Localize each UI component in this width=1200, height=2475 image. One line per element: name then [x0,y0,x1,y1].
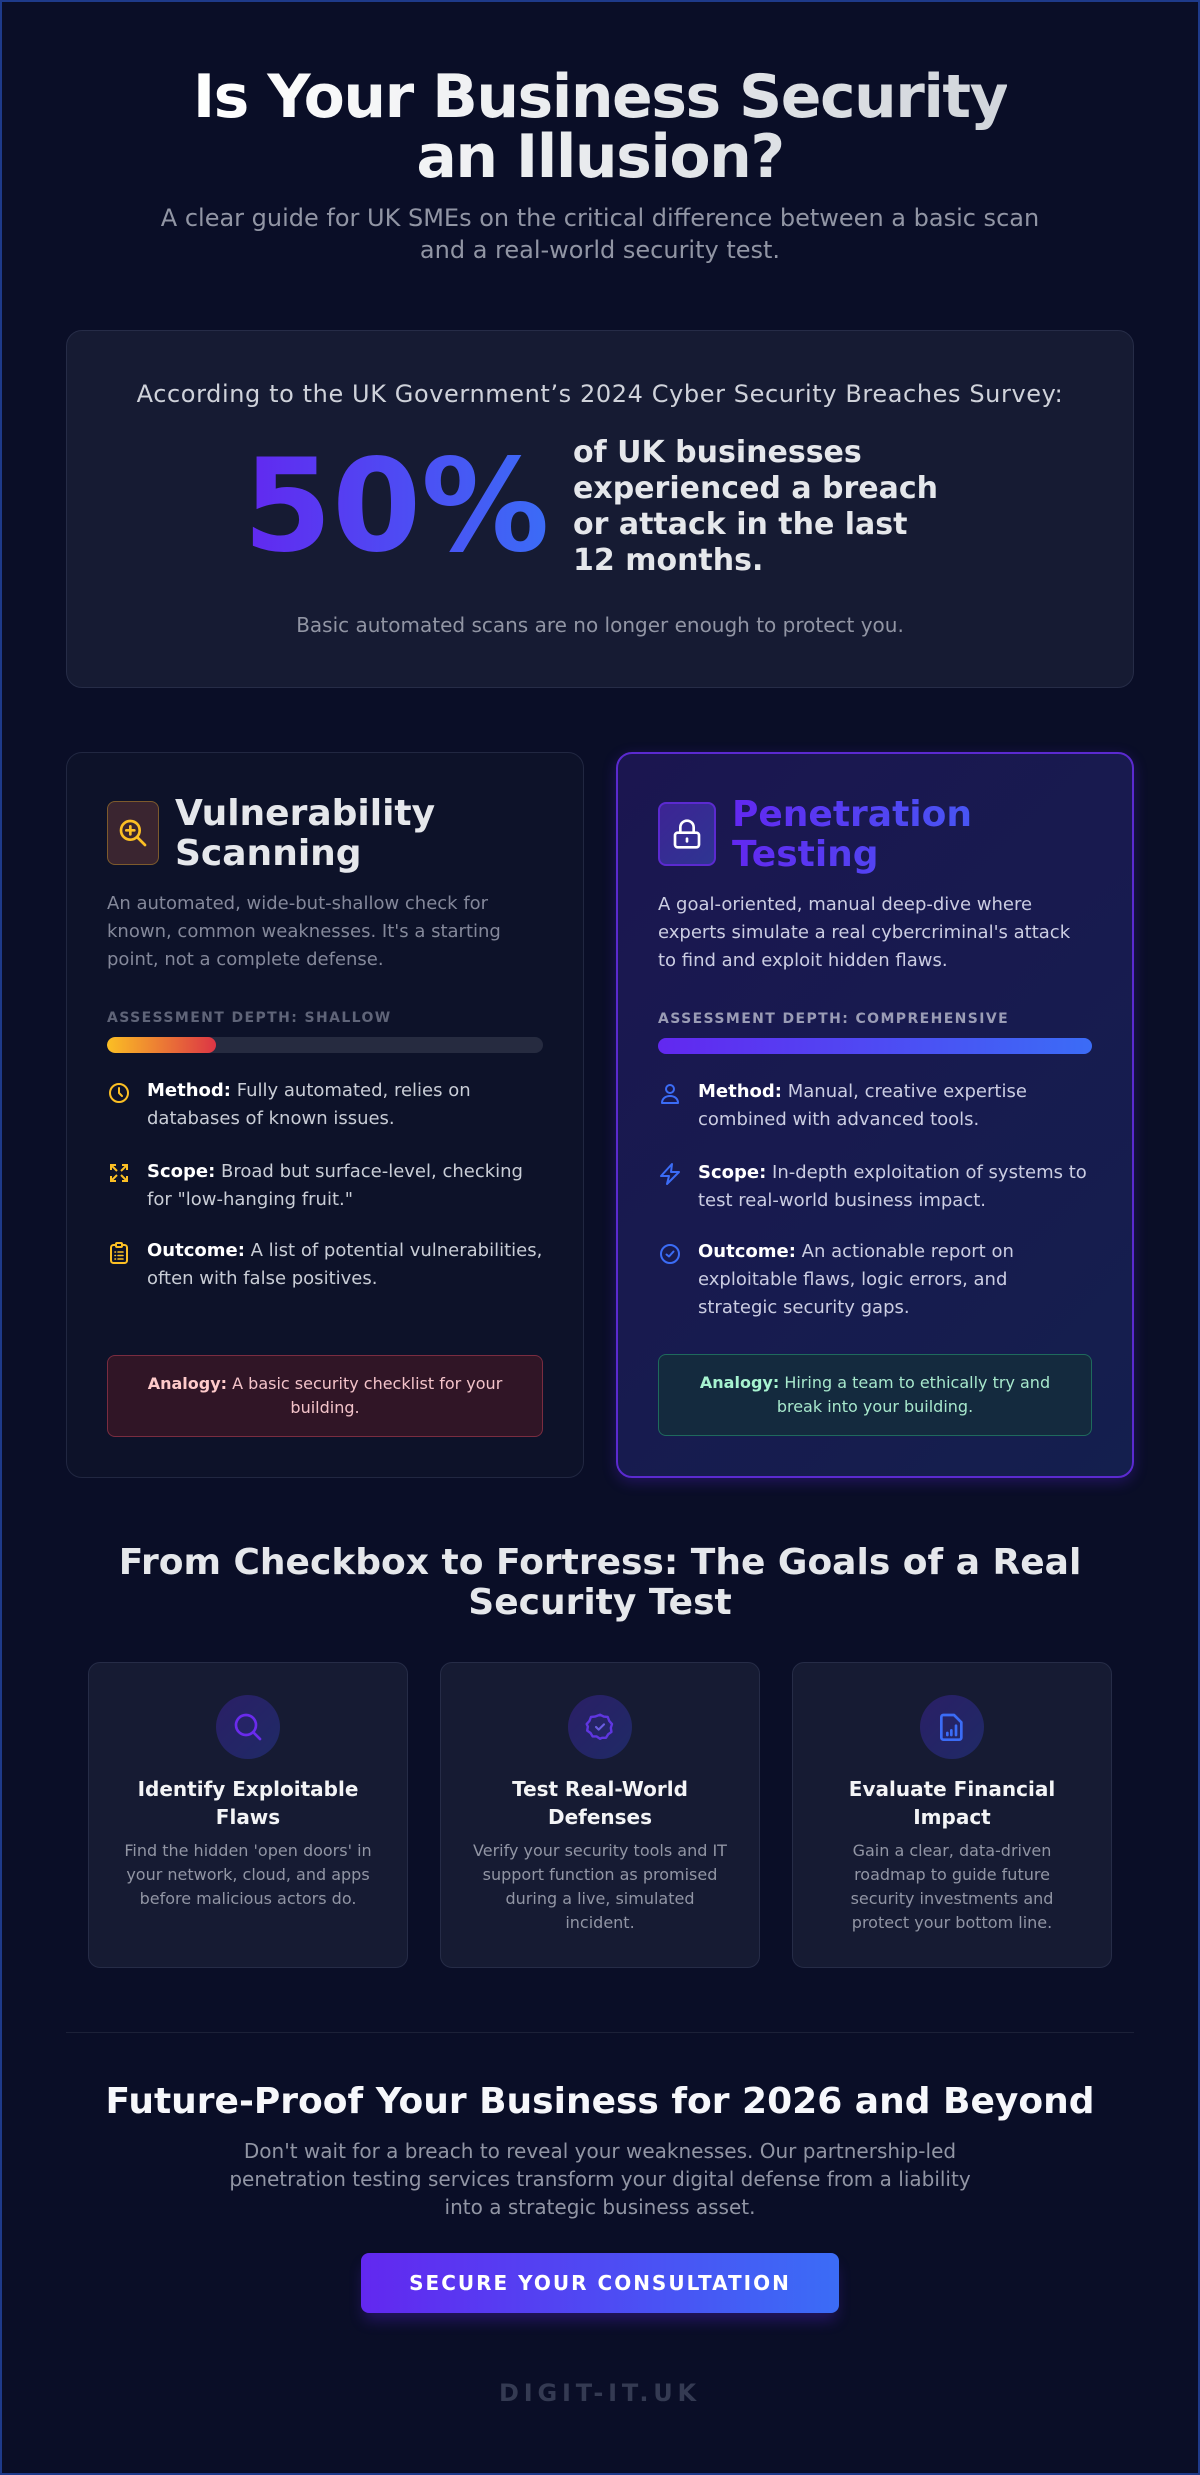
item: method: combined with advanced tools. [698,1109,979,1130]
footer text: into a strategic business asset. [445,2195,755,2219]
item: outcome [110,1240,542,1289]
description: experts simulate a real cybercriminal's attack [658,922,1070,943]
description: An automated, wide-but-shallow check for [107,893,488,914]
statistic description: experienced a breach [573,471,938,506]
item: outcome: exploitable flaws, logic errors, and [698,1269,1007,1290]
goal text [124,1841,372,1908]
item: scope: Scope: In-depth exploitation of systems to [698,1162,1087,1183]
heading [175,793,435,874]
goal text: during a live, simulated [506,1889,694,1908]
item: scope: Scope: Broad but surface-level, checking [147,1161,523,1182]
subtitle: A clear guide for UK SMEs on the critical difference between a basic scan [161,204,1039,232]
call to action button [361,2253,839,2313]
item: scope: test real-world business impact. [698,1190,986,1211]
goal heading: Defenses [548,1805,652,1829]
icon: shield badge [568,1695,632,1759]
panel: goal 3 [792,1662,1112,1968]
callout: analogy: Analogy: Hiring a team to ethically try and [700,1373,1050,1392]
item: outcome [660,1241,1014,1318]
heading: Vulnerability [175,793,435,834]
item: scope [660,1162,1087,1211]
item: method [661,1081,1027,1130]
section heading [119,1542,1081,1623]
goal heading: Impact [913,1805,991,1829]
footer heading: Future-Proof Your Business for 2026 and Beyond [106,2081,1094,2122]
item: method: Method: Manual, creative expertise [698,1081,1027,1102]
callout: analogy: Analogy: A basic security checklist for your [148,1374,502,1393]
call to action button: SECURE YOUR CONSULTATION [409,2271,791,2295]
statistic description [573,435,938,578]
goal heading [512,1777,688,1829]
description: A goal-oriented, manual deep-dive where [658,894,1032,915]
description [658,894,1070,971]
survey source line: According to the UK Government’s 2024 Cyber Security Breaches Survey: [137,380,1063,408]
icon: padlock [658,802,716,866]
goal text: Verify your security tools and IT [473,1841,727,1860]
icon: magnifier with plus [107,801,159,865]
footer text: Don't wait for a breach to reveal your weaknesses. Our partnership-led [244,2139,956,2163]
goal text: Find the hidden 'open doors' in [124,1841,372,1860]
big number 50%: 50% [243,432,549,581]
goal text: protect your bottom line. [852,1913,1052,1932]
description: to find and exploit hidden flaws. [658,950,948,971]
goal text: roadmap to guide future [854,1865,1050,1884]
item: method: databases of known issues. [147,1108,395,1129]
statistic description: 12 months. [573,543,763,578]
description: known, common weaknesses. It's a starting [107,921,501,942]
item: outcome: often with false positives. [147,1268,377,1289]
goal heading: Evaluate Financial [849,1777,1055,1801]
callout: analogy [658,1354,1092,1436]
goal heading: Flaws [216,1805,280,1829]
item: method: Method: Fully automated, relies on [147,1080,471,1101]
callout: analogy: building. [290,1398,360,1417]
title [193,62,1007,192]
panel: goal 1 [88,1662,408,1968]
description: point, not a complete defense. [107,949,384,970]
statistic description: or attack in the last [573,507,908,542]
goal text: incident. [565,1913,635,1932]
item: outcome: strategic security gaps. [698,1297,910,1318]
description [107,893,501,970]
goal text [851,1841,1053,1932]
icon: document chart [920,1695,984,1759]
callout: analogy: break into your building. [777,1397,973,1416]
goal text [473,1841,727,1932]
panel: vulnerability scanning [66,752,584,1478]
goal text: security investments and [851,1889,1053,1908]
goal heading: Identify Exploitable [138,1777,358,1801]
depth bar: 100% [658,1038,1092,1054]
item: method [109,1080,471,1129]
statistic note: Basic automated scans are no longer enough to protect you. [296,613,904,637]
goal text: your network, cloud, and apps [126,1865,370,1884]
brand wordmark: DIGIT-IT.UK [499,2379,701,2407]
goal text: support function as promised [483,1865,717,1884]
item: scope [110,1161,523,1210]
depth bar: 25% [107,1037,543,1053]
title: Is Your Business Security [193,62,1007,132]
depth label: ASSESSMENT DEPTH: SHALLOW [107,1010,392,1026]
icon: search [216,1695,280,1759]
heading: Penetration [732,794,972,835]
section heading: From Checkbox to Fortress: The Goals of a Real [119,1542,1081,1583]
statistic description: of UK businesses [573,435,862,470]
goal heading [849,1777,1055,1829]
goal text: Gain a clear, data-driven [853,1841,1051,1860]
panel: penetration testing [616,752,1134,1478]
goal heading [138,1777,358,1829]
depth label: ASSESSMENT DEPTH: COMPREHENSIVE [658,1011,1009,1027]
footer text [229,2139,971,2219]
panel: goal 2 [440,1662,760,1968]
goal heading: Test Real-World [512,1777,688,1801]
subtitle [161,204,1039,264]
subtitle: and a real-world security test. [420,236,780,264]
panel: statistic [66,330,1134,688]
goal text: before malicious actors do. [140,1889,356,1908]
section heading: Security Test [468,1582,732,1623]
heading: Testing [732,834,879,875]
item: scope: for "low-hanging fruit." [147,1189,353,1210]
callout: analogy [107,1355,543,1437]
heading [732,795,1092,875]
footer text: penetration testing services transform your digital defense from a liability [229,2167,971,2191]
heading: Scanning [175,833,362,874]
item: outcome: Outcome: A list of potential vulnerabilities, [147,1240,542,1261]
title: an Illusion? [416,122,784,192]
item: outcome: Outcome: An actionable report on [698,1241,1014,1262]
